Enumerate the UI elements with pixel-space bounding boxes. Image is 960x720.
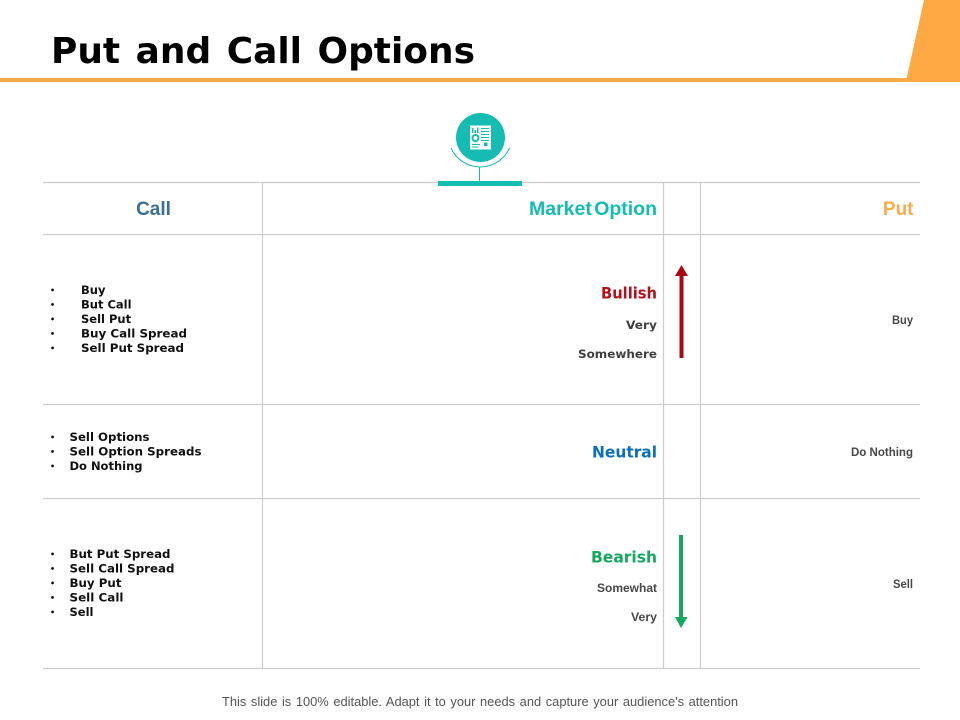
bearish call list: • bbox=[50, 608, 55, 617]
market state: Bearish bbox=[591, 548, 657, 624]
bullish call list: • bbox=[50, 315, 55, 324]
arrow: down bbox=[675, 535, 688, 628]
bullish call list: Buy Call Spread bbox=[81, 326, 187, 340]
bearish call list: Buy Put bbox=[70, 576, 122, 590]
put action: Do Nothing: Do Nothing bbox=[851, 445, 913, 459]
market state: Bullish: Very bbox=[626, 318, 658, 332]
neutral call list: • bbox=[50, 448, 55, 456]
bullish call list: Sell Put bbox=[81, 312, 132, 326]
market state: Bearish: Very bbox=[631, 610, 657, 624]
market state: Bullish bbox=[578, 284, 658, 361]
market state: Bullish: Bullish bbox=[601, 284, 657, 302]
title: Put and Call Options bbox=[51, 31, 475, 72]
bullish call list: • bbox=[50, 300, 55, 310]
neutral call list: Sell Options bbox=[70, 430, 150, 444]
bullish call list: But Call bbox=[81, 298, 132, 312]
bearish call list: • bbox=[50, 579, 55, 588]
bullish call list: Sell Put Spread bbox=[81, 341, 184, 355]
column heading: Market Option: Market Option bbox=[529, 199, 657, 220]
put action: Sell: Sell bbox=[893, 577, 913, 591]
neutral call list: • bbox=[50, 433, 55, 442]
header band bbox=[0, 0, 960, 82]
arrow: up bbox=[675, 265, 688, 358]
put action: Buy: Buy bbox=[892, 313, 913, 327]
bullish call list: • bbox=[50, 330, 55, 338]
bearish call list: • bbox=[50, 594, 55, 602]
market state: Neutral: Neutral bbox=[592, 442, 657, 462]
neutral call list bbox=[50, 430, 202, 473]
market state: Bearish: Somewhat bbox=[597, 581, 657, 595]
bearish call list: • bbox=[50, 550, 55, 559]
bullish call list bbox=[50, 283, 187, 355]
bearish call list: Sell Call bbox=[70, 590, 124, 604]
bearish call list bbox=[50, 547, 174, 619]
table grid bbox=[43, 182, 920, 668]
bullish call list: • bbox=[50, 286, 55, 295]
bullish call list: • bbox=[50, 344, 55, 353]
bearish call list: Sell Call Spread bbox=[70, 562, 174, 576]
column heading: Put: Put bbox=[883, 199, 914, 220]
footer note: This slide is 100% editable. Adapt it to your needs and capture your audience's attention bbox=[222, 694, 738, 709]
neutral call list: Sell Option Spreads bbox=[70, 444, 202, 458]
bearish call list: Sell bbox=[70, 605, 93, 619]
neutral call list: Do Nothing bbox=[70, 459, 142, 473]
icon: report in teal circle on stand bbox=[438, 113, 522, 186]
bullish call list: Buy bbox=[81, 283, 106, 297]
market state: Bearish: Bearish bbox=[591, 548, 657, 566]
bearish call list: • bbox=[50, 564, 55, 574]
market state: Bullish: Somewhere bbox=[578, 347, 657, 361]
column heading: Call: Call bbox=[136, 199, 171, 220]
bearish call list: But Put Spread bbox=[70, 547, 170, 561]
neutral call list: • bbox=[50, 462, 55, 471]
